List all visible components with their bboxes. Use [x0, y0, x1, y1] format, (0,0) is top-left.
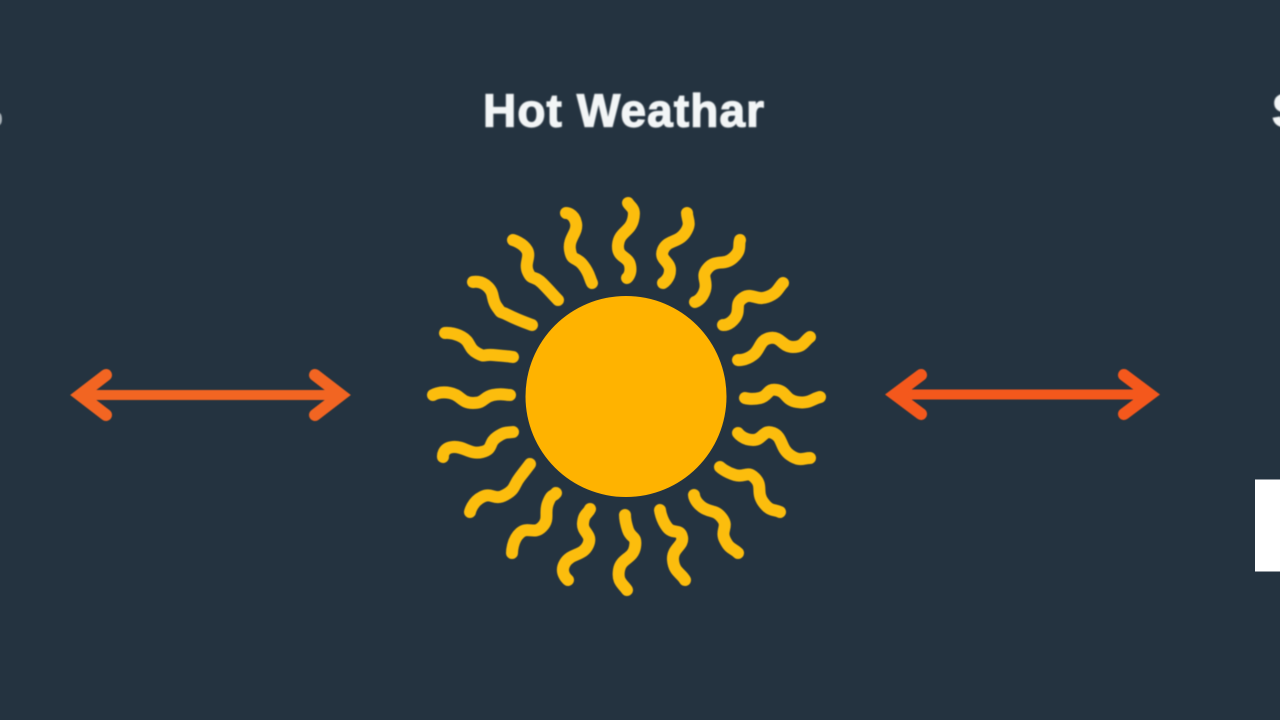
clipped white panel at right edge [1255, 480, 1280, 572]
sun disc [526, 296, 726, 497]
clipped heading fragment: left edge [0, 113, 2, 125]
arrow: right double-headed [895, 375, 1150, 414]
heading: Hot Weather: Hot Weathar [483, 84, 765, 136]
sun wavy rays [433, 203, 820, 590]
arrow: left double-headed [80, 375, 341, 415]
icon: sun [433, 203, 820, 590]
